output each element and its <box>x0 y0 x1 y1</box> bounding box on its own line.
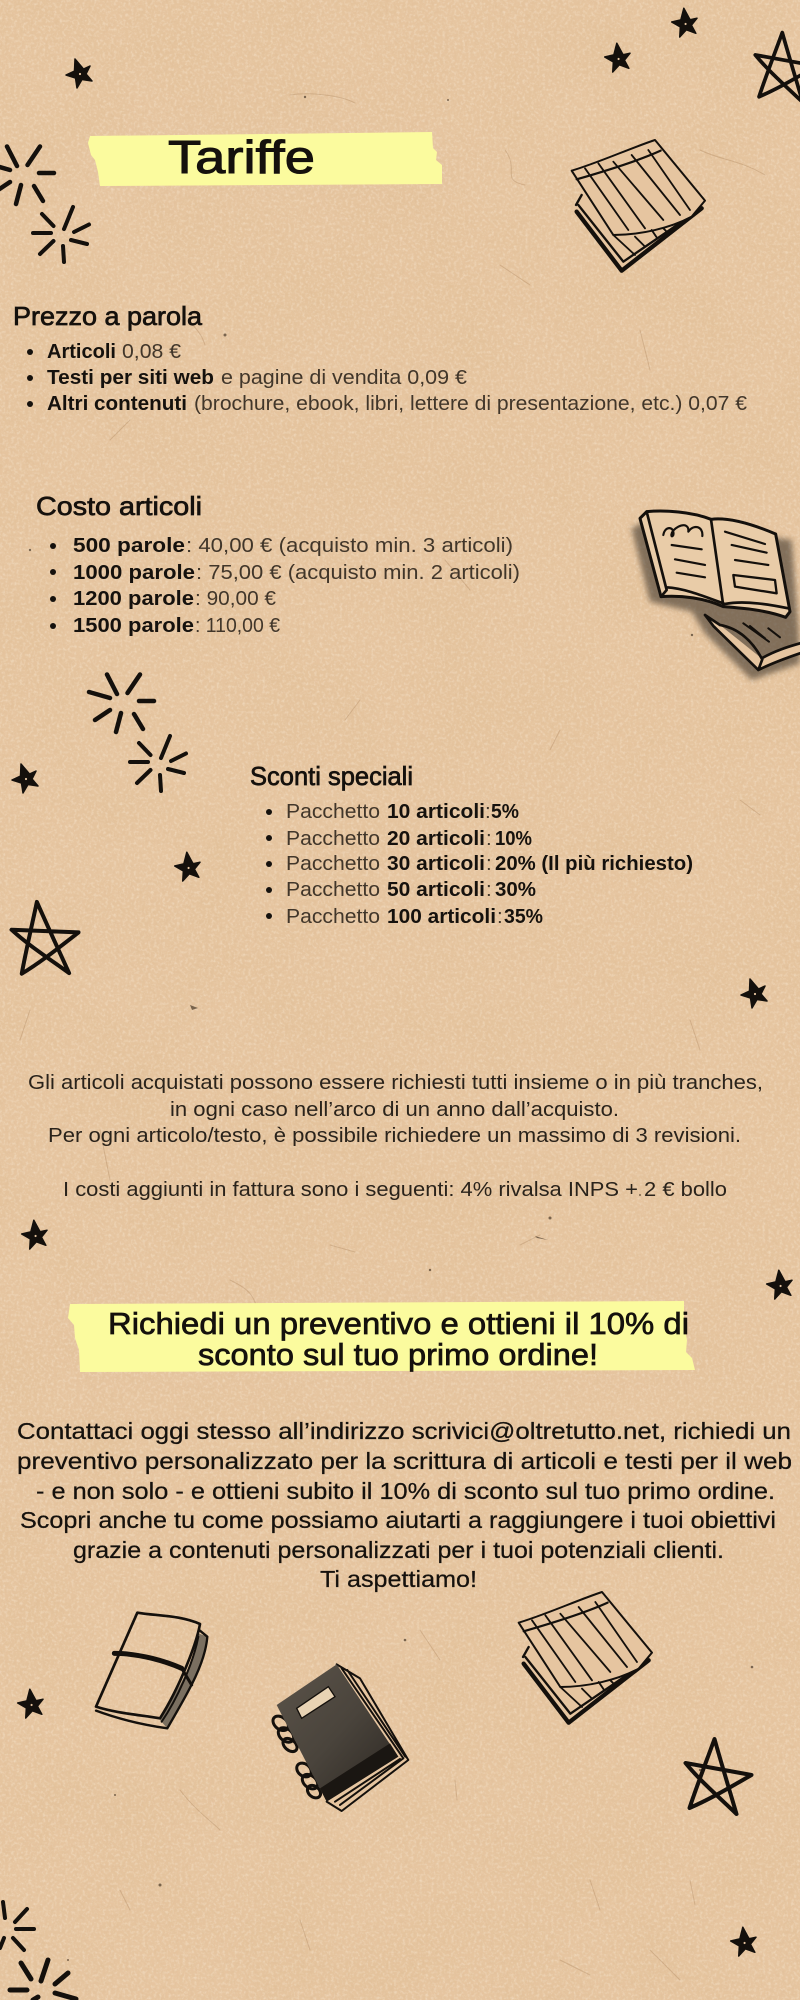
section: prezzo a parola <box>13 301 748 415</box>
text block: contact <box>17 1418 792 1592</box>
callout banner <box>68 1301 695 1372</box>
article cost list: 1000 parole <box>73 561 195 584</box>
discount list: Pacchetto <box>286 800 380 823</box>
text block: conditions <box>28 1071 763 1201</box>
decorative small star <box>728 1925 759 1959</box>
heading: Sconti speciali <box>250 761 413 791</box>
price list <box>47 340 748 415</box>
discount list: 5% <box>491 800 519 823</box>
price list: Testi per siti web <box>47 366 214 389</box>
discount list: 10 articoli <box>387 800 485 823</box>
callout banner: sconto sul tuo primo ordine! <box>198 1337 598 1372</box>
discount list: Pacchetto <box>286 905 380 928</box>
price list: (brochure, ebook, libri, lettere di presentazione, etc.) 0,07 € <box>194 392 748 415</box>
title: Tariffe <box>168 131 315 183</box>
article cost list: : 75,00 € (acquisto min. 2 articoli) <box>196 561 520 584</box>
article cost list: : 40,00 € (acquisto min. 3 articoli) <box>186 534 513 557</box>
decorative small star <box>764 1268 795 1302</box>
price list: 0,08 € <box>122 340 182 363</box>
text block: contact: preventivo personalizzato per la scrittura di articoli e testi per il web <box>17 1448 792 1474</box>
text block: conditions: Per ogni articolo/testo, è possibile richiedere un massimo di 3 revisioni. <box>48 1124 741 1147</box>
discount list <box>286 800 693 928</box>
discount list: : <box>486 852 492 875</box>
callout text: Richiedi un preventivo e ottieni il 10% di <box>108 1306 689 1341</box>
discount list: 10% <box>495 827 532 850</box>
decorative sparkle <box>89 674 154 732</box>
icon: notepad <box>519 1592 652 1725</box>
discount list: 30% <box>495 878 536 901</box>
decorative outline star <box>686 1739 752 1814</box>
icon: black spiral notebook <box>270 1664 408 1811</box>
decorative small star <box>12 764 38 793</box>
article cost list: 500 parole <box>73 534 185 557</box>
title banner <box>88 131 442 186</box>
discount list: 100 articoli <box>387 905 496 928</box>
icon: journal with band <box>96 1613 207 1728</box>
discount list: Pacchetto <box>286 878 380 901</box>
decorative sparkle <box>130 736 186 791</box>
discount list: : <box>497 905 503 928</box>
bullets <box>266 809 272 919</box>
price list: e pagine di vendita 0,09 € <box>221 366 468 389</box>
decorative sparkle <box>0 146 54 204</box>
price list: Articoli <box>47 340 116 363</box>
decorative small star <box>741 979 767 1008</box>
article cost list: 1200 parole <box>73 587 194 610</box>
section: costo articoli <box>36 491 520 637</box>
text block: contact: Ti aspettiamo! <box>320 1566 477 1592</box>
article cost list: : 90,00 € <box>195 587 277 610</box>
discount list: 30 articoli <box>387 852 485 875</box>
discount list: 20 articoli <box>387 827 485 850</box>
discount list: 35% <box>504 905 543 928</box>
decorative small star <box>172 850 203 884</box>
text block: conditions: I costi aggiunti in fattura sono i seguenti: 4% rivalsa INPS + 2 € bollo <box>63 1178 727 1201</box>
decorative sparkle <box>0 1902 34 1950</box>
discount list: : <box>486 827 492 850</box>
section: sconti speciali <box>250 761 693 928</box>
discount list: : <box>485 800 491 823</box>
discount list: 20% (Il più richiesto) <box>495 852 693 875</box>
decorative small star <box>602 41 633 75</box>
discount list: : <box>486 878 492 901</box>
text block: contact: grazie a contenuti personalizzati per i tuoi potenziali clienti. <box>73 1537 724 1563</box>
heading: Prezzo a parola <box>13 301 203 331</box>
discount list: 50 articoli <box>387 878 485 901</box>
bullets <box>50 543 56 629</box>
text block: contact: - e non solo - e ottieni subito il 10% di sconto sul tuo primo ordine. <box>36 1478 775 1504</box>
decorative small star <box>669 6 700 40</box>
decorative outline star <box>755 33 800 102</box>
discount list: Pacchetto <box>286 852 380 875</box>
discount list: Pacchetto <box>286 827 380 850</box>
text block: conditions: in ogni caso nell’arco di un anno dall’acquisto. <box>170 1098 619 1121</box>
decorative small star <box>15 1687 46 1721</box>
decorative small star <box>66 59 92 88</box>
text block: conditions: Gli articoli acquistati possono essere richiesti tutti insieme o in più tranches, <box>28 1071 763 1094</box>
icon: open books <box>632 511 800 680</box>
decorative small star <box>19 1218 50 1252</box>
decorative outline star <box>8 897 84 980</box>
price list: Altri contenuti <box>47 392 187 415</box>
text block: contact: Contattaci oggi stesso all’indirizzo scrivici@oltretutto.net, richiedi un <box>17 1418 791 1444</box>
text block: contact: Scopri anche tu come possiamo aiutarti a raggiungere i tuoi obiettivi <box>20 1507 776 1533</box>
article cost list <box>73 534 520 637</box>
heading: Costo articoli <box>36 491 202 521</box>
icon: notepad <box>572 140 705 273</box>
decorative sparkle <box>10 1960 76 2000</box>
article cost list: 1500 parole <box>73 614 194 637</box>
article cost list: : 110,00 € <box>195 614 281 637</box>
decorative sparkle <box>33 207 89 262</box>
bullets <box>27 349 33 407</box>
